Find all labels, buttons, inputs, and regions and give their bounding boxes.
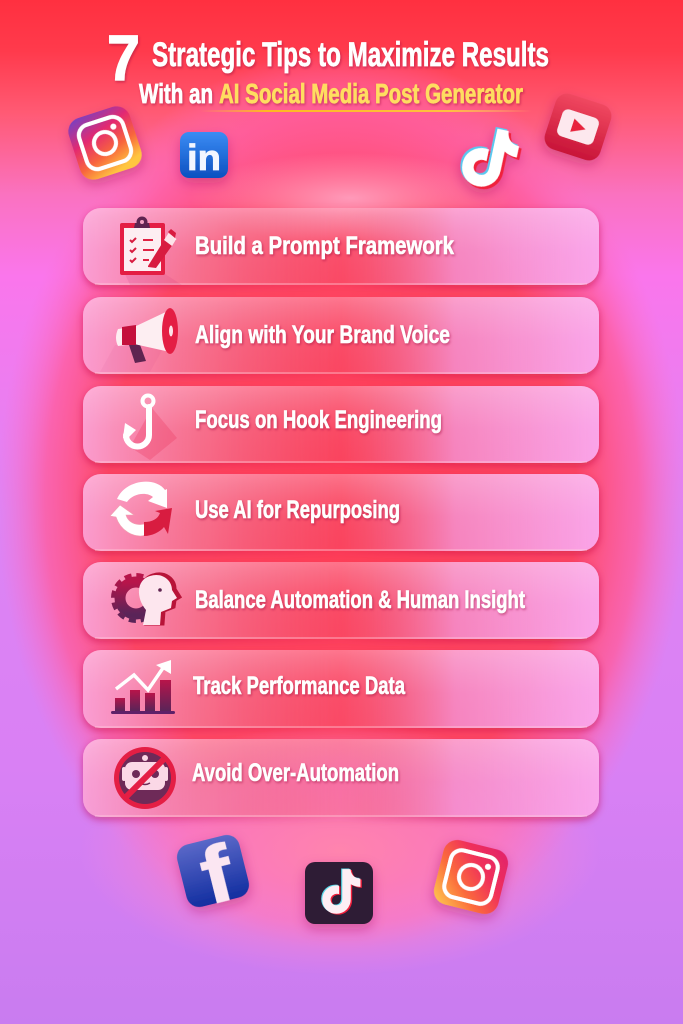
panel: track performance data	[83, 650, 599, 728]
label: Avoid Over-Automation	[192, 759, 399, 787]
icon: instagram top	[65, 103, 145, 183]
icon: megaphone	[100, 308, 178, 372]
panel: align with your brand voice	[83, 297, 599, 374]
title line two: With an	[139, 78, 213, 109]
label: Balance Automation & Human Insight	[195, 586, 525, 614]
label: Build a Prompt Framework	[195, 232, 454, 260]
panel: focus on hook engineering	[83, 386, 599, 463]
icon: repurpose arrows	[110, 482, 172, 536]
icon: tiktok note top	[457, 122, 524, 194]
panel: balance automation and human insight	[83, 562, 599, 639]
panel: avoid over-automation	[83, 739, 599, 817]
icon: facebook: f	[192, 828, 243, 921]
label: Use AI for Repurposing	[195, 496, 400, 524]
panel: use ai for repurposing	[83, 474, 599, 551]
icon: linkedin: in	[187, 137, 221, 178]
label: Align with Your Brand Voice	[195, 321, 450, 349]
label: Track Performance Data	[193, 672, 406, 700]
label: Focus on Hook Engineering	[195, 406, 442, 434]
icon: instagram bottom	[431, 837, 511, 917]
panel: build a prompt framework	[83, 208, 599, 285]
icon: facebook	[172, 824, 256, 926]
icon: fish hook	[123, 396, 177, 460]
icon: no robot	[114, 747, 176, 809]
icon: clipboard checklist	[120, 216, 182, 285]
icon: gear and head	[114, 574, 180, 625]
icon: tiktok dark	[305, 862, 373, 924]
title numeral 7: 7	[107, 22, 140, 94]
title	[107, 22, 549, 109]
title highlight: AI Social Media Post Generator	[219, 78, 523, 109]
icon: rising chart	[111, 660, 175, 714]
icon: youtube	[541, 90, 615, 164]
icon: linkedin	[180, 132, 228, 178]
title underline	[200, 110, 532, 112]
